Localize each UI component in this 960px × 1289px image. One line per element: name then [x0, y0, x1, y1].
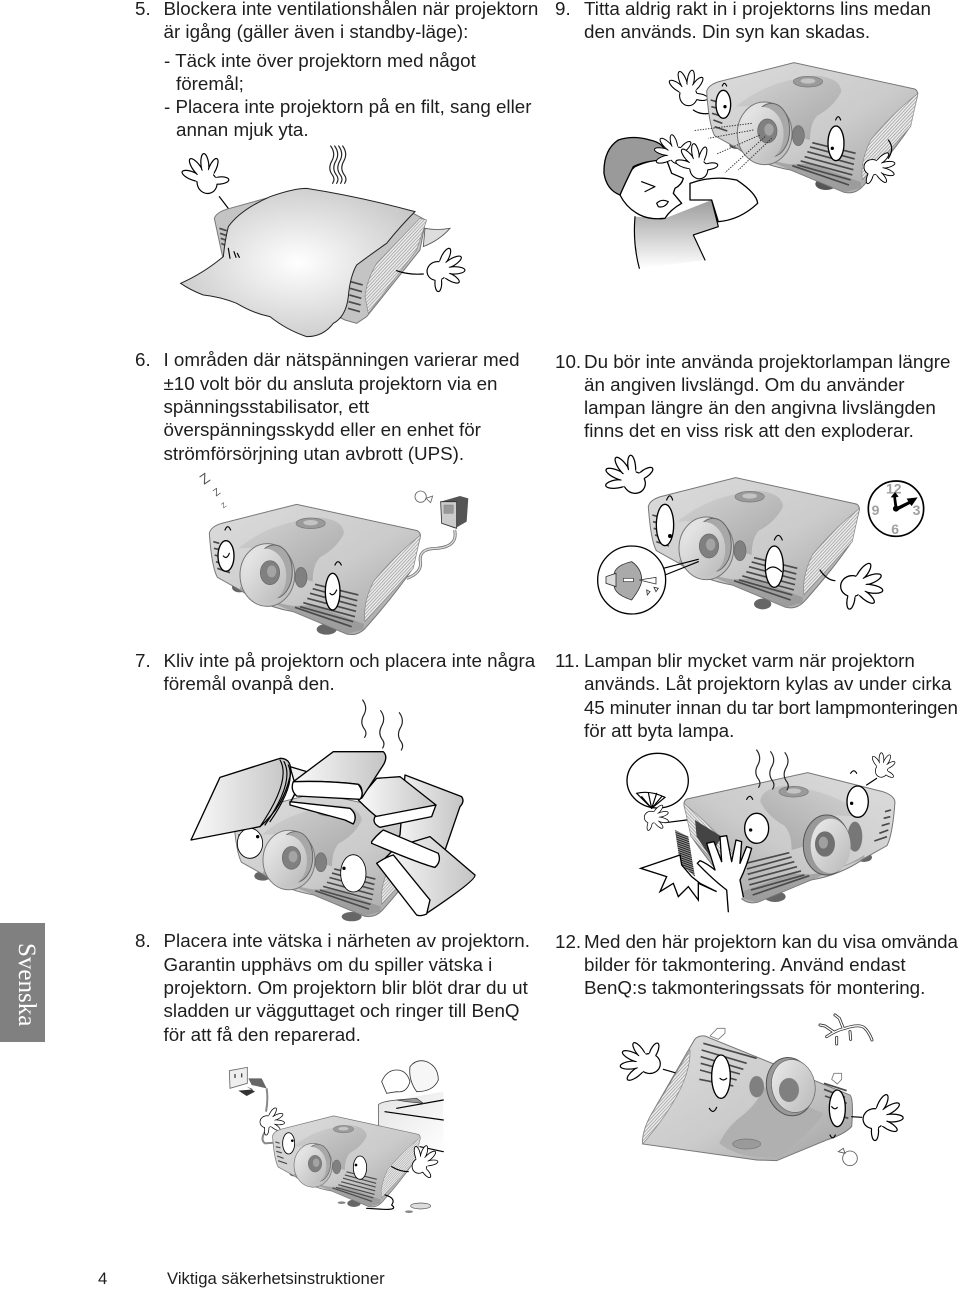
item 8 text: projektorn. Om projektorn blir blöt drar du ut	[164, 977, 529, 998]
item 11 text	[555, 650, 958, 741]
item 6 text	[135, 349, 520, 464]
item 6 text: strömförsörjning utan avbrott (UPS).	[164, 443, 464, 464]
item 7 text	[135, 650, 536, 694]
illustration: sleeping projector with voltage adapter	[197, 469, 468, 635]
item 10 text: finns det en viss risk att den exploderar.	[584, 420, 914, 441]
item 6 text: 6.	[135, 349, 151, 370]
item 11 text: används. Låt projektorn kylas av under cirka	[584, 673, 952, 694]
footer: Viktiga säkerhetsinstruktioner	[167, 1269, 385, 1288]
item 12 text	[555, 931, 959, 998]
icon: snoring Z letters: Z	[197, 469, 213, 487]
projector	[234, 793, 435, 917]
item 10 text: än angiven livslängd. Om du använder	[584, 374, 905, 395]
footer: 4	[98, 1269, 107, 1288]
language tab: Svenska	[0, 923, 45, 1042]
item 12 text: bilder för takmontering. Använd endast	[584, 954, 906, 975]
projector	[273, 1116, 420, 1207]
item 8 text: för att få den reparerad.	[164, 1024, 361, 1045]
item 11 text: Lampan blir mycket varm när projektorn	[584, 650, 915, 671]
item 5 text: annan mjuk yta.	[176, 119, 309, 140]
icon: vent grille	[675, 830, 695, 877]
icon: worried eyes	[656, 496, 783, 587]
icon: clock	[868, 480, 924, 537]
icon: raised hand	[595, 444, 658, 508]
icon: right hand	[397, 243, 470, 294]
item 8 text	[135, 930, 530, 1045]
item 10 text	[555, 351, 950, 441]
icon: eyes	[283, 1133, 367, 1179]
item 8 text: sladden ur vägguttaget och ringer till BenQ	[164, 1000, 520, 1021]
item 6 text: ±10 volt bör du ansluta projektorn via en	[164, 373, 497, 394]
icon: left hand	[617, 1036, 675, 1087]
item 7 text: föremål ovanpå den.	[164, 673, 335, 694]
icon: exploding lamp inset	[598, 546, 698, 614]
item 6 text: spänningsstabilisator, ett	[164, 396, 370, 417]
icon: thought bubble	[415, 491, 433, 503]
item 6 text: I områden där nätspänningen varierar med	[164, 349, 520, 370]
item 8 text: Placera inte vätska i närheten av projektorn.	[164, 930, 530, 951]
person	[604, 127, 758, 268]
item 9 text: den används. Din syn kan skadas.	[584, 21, 870, 42]
icon: sink and steam	[378, 1061, 443, 1157]
language tab: Svenska: Svenska	[13, 943, 40, 1026]
item 9 text	[555, 0, 931, 42]
lens	[749, 1053, 820, 1120]
projector	[648, 478, 860, 608]
icon: right hand	[852, 1090, 908, 1143]
icon: wide eyes	[745, 771, 868, 843]
icon: open hand	[820, 560, 885, 611]
item 11 text: för att byta lampa.	[584, 720, 734, 741]
icon: heat waves	[756, 750, 788, 790]
icon: small raised hand	[867, 750, 899, 785]
item 10 text: lampan längre än den angivna livslängden	[584, 397, 936, 418]
item 5 text: föremål;	[176, 73, 244, 94]
item 8 text: 8.	[135, 930, 151, 951]
illustration: ceiling mounted upside-down projector	[617, 1015, 908, 1166]
icon: snoring Z letters	[197, 469, 229, 510]
icon: thought bubble	[838, 1148, 857, 1166]
power cord	[407, 530, 455, 578]
icon: eyes	[716, 83, 844, 161]
item 12 text: 12.	[555, 931, 581, 952]
power cord with hand	[258, 1088, 287, 1143]
icon: eyes	[237, 828, 366, 892]
projector	[209, 504, 421, 635]
icon: clock: 12	[886, 480, 902, 496]
projector upside down	[643, 1028, 853, 1161]
item 8 text: Garantin upphävs om du spiller vätska i	[164, 954, 492, 975]
item 5 text: - Täck inte över projektorn med något	[164, 50, 477, 71]
icon: voltage adapter	[441, 496, 468, 528]
blanket	[181, 188, 415, 337]
icon: snoring Z letters: Z	[220, 501, 229, 510]
illustration: wet projector unplugged from wall	[229, 1061, 445, 1213]
icon: wall outlet and plug	[229, 1067, 267, 1096]
illustration: books stacked on projector	[191, 700, 475, 921]
icon: projector back left hand	[666, 68, 710, 114]
projector	[707, 63, 918, 193]
icon: warning hand and burst	[641, 836, 752, 912]
item 11 text: 45 minuter innan du tar bort lampmonteringen	[584, 697, 958, 718]
item 5 text: är igång (gäller även i standby-läge):	[164, 21, 468, 42]
lens	[803, 815, 862, 875]
item 12 text: BenQ:s takmonteringssats för montering.	[584, 977, 925, 998]
illustration: hot projector with fan and warning hand	[627, 750, 899, 912]
icon: clock: 9	[872, 502, 880, 518]
icon: heat waves	[362, 700, 403, 750]
item 11 text: 11.	[555, 650, 580, 671]
icon: snoring Z letters: Z	[211, 487, 223, 499]
projector	[684, 773, 895, 903]
icon: heat waves	[330, 146, 346, 183]
item 12 text: Med den här projektorn kan du visa omvända	[584, 931, 959, 952]
books	[191, 752, 475, 916]
icon: clock: 3	[913, 502, 921, 518]
item 10 text: Du bör inte använda projektorlampan längre	[584, 351, 950, 372]
item 10 text: 10.	[555, 351, 581, 372]
icon: hand	[392, 1139, 445, 1181]
illustration: projector covered by blanket	[176, 146, 470, 337]
icon: left hand	[176, 147, 232, 201]
icon: light rays	[693, 123, 772, 173]
icon: clock: 6	[891, 521, 899, 537]
item 7 text: 7.	[135, 650, 151, 671]
icon: gecko	[820, 1015, 872, 1044]
illustration: projector with clock and exploding lamp	[595, 444, 924, 614]
illustration: person shielding eyes from lens	[604, 63, 918, 268]
item 7 text: Kliv inte på projektorn och placera inte några	[164, 650, 536, 671]
icon: hand fan	[627, 753, 688, 831]
item 6 text: överspänningsskydd eller en enhet för	[164, 419, 481, 440]
puddles	[338, 1195, 431, 1213]
icon: closed eyes	[218, 527, 341, 610]
item 5 text: - Placera inte projektorn på en filt, sang eller	[164, 96, 531, 117]
icon: closed eyes	[709, 1055, 845, 1138]
item 5 text	[135, 0, 538, 140]
icon: projector right hand	[862, 140, 897, 187]
